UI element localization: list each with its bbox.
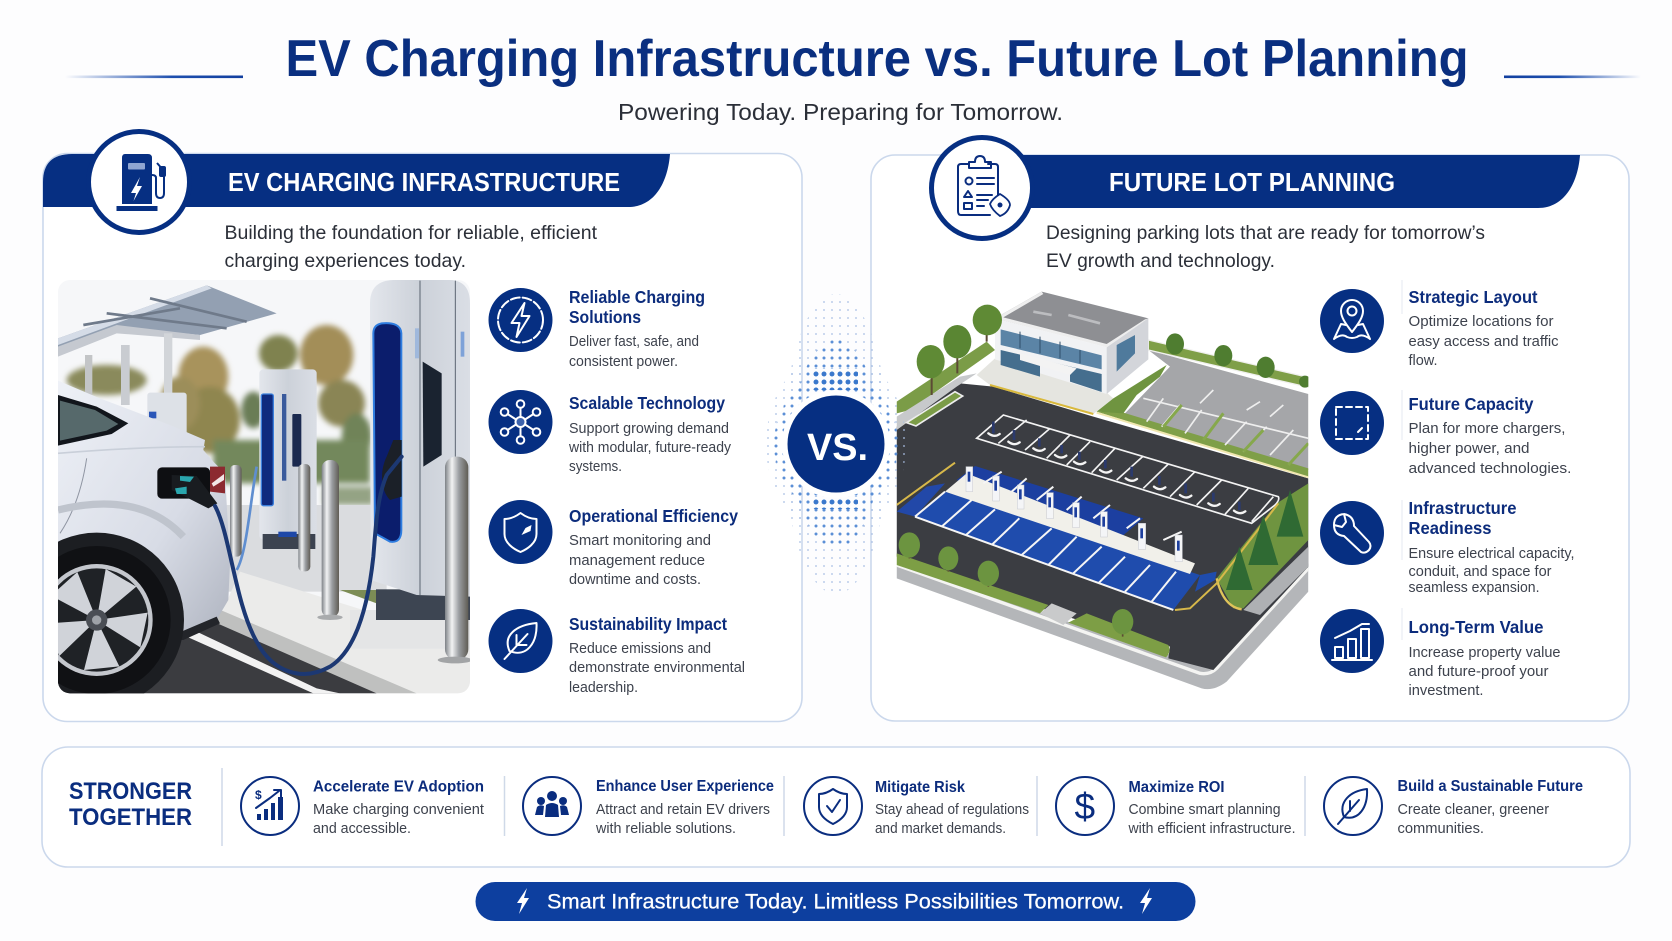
description: Plan for more chargers, <box>1408 421 1566 437</box>
heading: Future Capacity <box>1408 394 1534 414</box>
description: Make charging convenient <box>313 802 484 818</box>
heading: Readiness <box>1408 518 1492 538</box>
icon: clipboard checklist <box>932 138 1032 238</box>
benefit: Enhance User Experience <box>523 777 774 837</box>
feature: Infrastructure Readiness <box>1320 498 1574 596</box>
yellow kerbs <box>897 463 1278 610</box>
icon: dollar sign: $ <box>1074 786 1095 827</box>
icon: people group <box>523 777 581 835</box>
plaza <box>977 358 1113 414</box>
photo: electric car charging at station <box>58 280 470 694</box>
description: easy access and traffic <box>1408 334 1558 350</box>
charge port and plug <box>157 467 210 499</box>
title: EV Charging Infrastructure vs. Future Lot Planning <box>286 30 1468 88</box>
description: seamless expansion. <box>1408 580 1540 596</box>
icon: rising bars <box>1320 609 1384 673</box>
description: Reduce emissions and <box>569 641 711 657</box>
feature: Operational Efficiency <box>488 500 738 588</box>
description: advanced technologies. <box>1408 461 1572 477</box>
middle charger <box>259 369 317 539</box>
subtitle: Powering Today. Preparing for Tomorrow. <box>618 99 1063 125</box>
right grass <box>1217 483 1308 608</box>
heading <box>1408 498 1517 538</box>
description: with modular, future-ready <box>568 440 732 456</box>
description <box>569 334 699 370</box>
heading: Sustainability Impact <box>569 614 727 634</box>
description: demonstrate environmental <box>569 660 745 676</box>
description: Stay ahead of regulations <box>875 802 1029 818</box>
description: Combine smart planning <box>1128 802 1280 818</box>
description <box>568 421 732 475</box>
icon: growth chart <box>241 777 299 835</box>
panel description: Designing parking lots that are ready for tomorrow’s <box>1046 222 1485 244</box>
description <box>1408 314 1558 369</box>
icon: growth chart: $ <box>255 788 262 802</box>
description: Increase property value <box>1408 645 1560 661</box>
heading: Operational Efficiency <box>569 506 738 526</box>
description <box>1398 802 1549 837</box>
description: Ensure electrical capacity, <box>1408 546 1574 562</box>
icon: dashed square <box>1320 391 1384 455</box>
panel: stronger together <box>42 747 1630 867</box>
icon: fuel style charger <box>88 132 190 232</box>
charger posts <box>966 467 1182 562</box>
description: higher power, and <box>1408 441 1530 457</box>
description: Smart monitoring and <box>569 533 711 549</box>
tagline text: Smart Infrastructure Today. Limitless Possibilities Tomorrow. <box>547 890 1124 914</box>
faint feature dividers <box>1401 280 1403 640</box>
description: investment. <box>1408 683 1484 699</box>
car body <box>58 381 230 640</box>
icon: shield with check <box>804 777 862 835</box>
upper right grey lot <box>1123 350 1308 470</box>
icon: wrench <box>1320 501 1384 565</box>
grass strips inside grey lot <box>1163 405 1308 465</box>
concrete platform <box>897 563 1308 689</box>
heading: Mitigate Risk <box>875 779 965 796</box>
panel heading: EV CHARGING INFRASTRUCTURE <box>228 167 620 197</box>
icon: right bolt <box>1140 888 1152 914</box>
bottom green strips <box>897 553 1048 613</box>
description <box>1128 802 1296 837</box>
blurred trees <box>67 325 373 505</box>
panel description: charging experiences today. <box>224 250 466 272</box>
description <box>1408 421 1572 477</box>
bollards <box>230 465 242 557</box>
icon: network nodes <box>488 390 552 454</box>
description: Attract and retain EV drivers <box>596 802 770 818</box>
description: leadership. <box>569 680 638 696</box>
panel heading: FUTURE LOT PLANNING <box>1109 167 1395 197</box>
heading: Build a Sustainable Future <box>1398 778 1583 795</box>
description: and market demands. <box>875 821 1006 837</box>
illustration: isometric parking lot <box>897 292 1311 689</box>
heading: Scalable Technology <box>569 393 725 413</box>
icon: bolt in dashed circle <box>488 288 552 352</box>
heading: Accelerate EV Adoption <box>313 778 484 796</box>
description <box>875 802 1029 837</box>
tagline banner <box>476 882 1196 921</box>
benefit: Mitigate Risk <box>804 777 1029 837</box>
trees behind building <box>917 305 1311 395</box>
car wheel <box>58 532 184 694</box>
heading: Reliable Charging <box>569 287 705 307</box>
description: Create cleaner, greener <box>1398 802 1549 818</box>
canopy <box>58 285 277 350</box>
description <box>569 641 745 696</box>
heading: Strategic Layout <box>1408 287 1538 307</box>
panel description <box>224 222 598 272</box>
dark parking row <box>977 415 1279 523</box>
road <box>58 622 377 693</box>
distant charger <box>147 393 187 436</box>
description: systems. <box>569 459 622 475</box>
blue charging row <box>957 466 1143 537</box>
description: communities. <box>1398 821 1484 837</box>
building <box>995 292 1148 347</box>
benefit: Build a Sustainable Future <box>1324 777 1583 837</box>
heading: Long-Term Value <box>1408 617 1544 637</box>
description <box>313 802 484 837</box>
near bollards <box>322 460 339 617</box>
panel description <box>1046 222 1485 272</box>
foreground trees <box>899 490 1303 637</box>
heading: Solutions <box>569 307 641 327</box>
panel description: EV growth and technology. <box>1046 250 1275 272</box>
description: downtime and costs. <box>569 572 701 588</box>
description: Deliver fast, safe, and <box>569 334 699 350</box>
panel: EV charging infrastructure <box>9 132 802 722</box>
description: flow. <box>1408 353 1438 369</box>
benefit: Accelerate EV Adoption <box>241 777 484 837</box>
description: and future-proof your <box>1408 664 1549 680</box>
feature: Scalable Technology <box>488 390 732 475</box>
VS badge with halftone dots: VS. <box>807 427 868 469</box>
feature: Future Capacity <box>1320 391 1572 477</box>
benefit: Maximize ROI <box>1056 777 1296 837</box>
description: consistent power. <box>569 354 678 370</box>
section heading <box>69 778 192 831</box>
asphalt <box>897 383 1308 670</box>
description: Support growing demand <box>569 421 729 437</box>
VS badge with halftone dots <box>766 294 906 594</box>
heading <box>569 287 705 327</box>
description <box>1408 546 1574 596</box>
description: with efficient infrastructure. <box>1128 821 1296 837</box>
icon: left bolt <box>517 888 529 914</box>
upper left green strip and path <box>897 342 995 413</box>
description: conduit, and space for <box>1408 564 1552 580</box>
description: and accessible. <box>313 821 411 837</box>
feature: Strategic Layout <box>1320 287 1558 369</box>
description: with reliable solutions. <box>595 821 736 837</box>
description <box>595 802 770 837</box>
pavement far <box>220 505 387 592</box>
icon: leaf <box>488 609 552 673</box>
icon: dollar sign <box>1056 777 1114 835</box>
icon: leaf outline <box>1324 777 1382 835</box>
panel: future lot planning <box>871 138 1629 721</box>
near pavement and curb <box>220 572 470 693</box>
heading: Maximize ROI <box>1128 779 1224 796</box>
section heading: STRONGER <box>69 778 192 805</box>
heading: Infrastructure <box>1408 498 1517 518</box>
panel description: Building the foundation for reliable, efficient <box>224 222 598 244</box>
description: Optimize locations for <box>1408 314 1554 330</box>
section heading: TOGETHER <box>69 804 192 831</box>
icon: shield with gauge <box>488 500 552 564</box>
heading: Enhance User Experience <box>596 778 774 795</box>
feature: Reliable Charging Solutions <box>488 287 705 370</box>
near charger <box>366 610 470 644</box>
description: management reduce <box>569 553 705 569</box>
feature: Sustainability Impact <box>488 609 745 696</box>
panel header band <box>43 154 670 207</box>
feature: Long-Term Value <box>1320 609 1560 699</box>
panel header band <box>1000 155 1580 208</box>
description <box>1408 645 1560 699</box>
description <box>569 533 711 588</box>
icon: map pin <box>1320 289 1384 353</box>
charging cable <box>215 457 402 674</box>
